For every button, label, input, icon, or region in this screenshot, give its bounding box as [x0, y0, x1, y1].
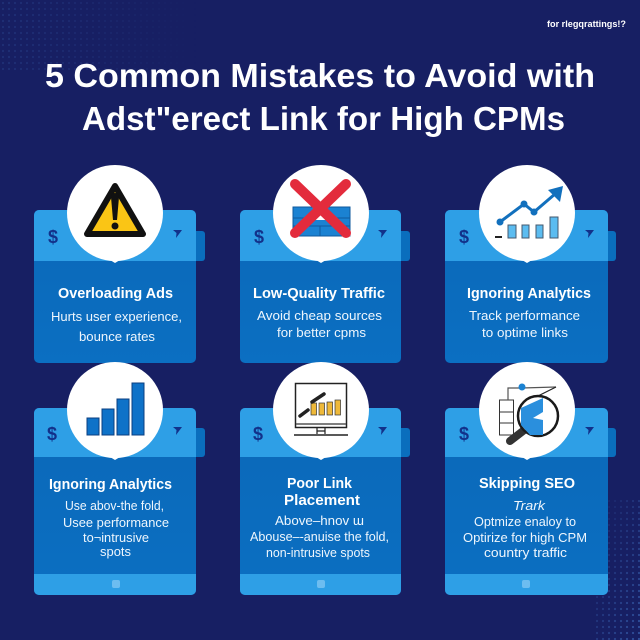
- panel: ignoring analytics top: $: [459, 227, 469, 247]
- text: overloading ads description: [51, 309, 182, 344]
- text: skipping seo description: Optirize for high CPM: [463, 530, 587, 545]
- text: ignoring analytics top description: [469, 308, 580, 340]
- text: skipping seo description: [463, 498, 587, 560]
- heading: ignoring analytics top: Ignoring Analytics: [467, 286, 591, 302]
- text: ignoring analytics top description: Track performance: [469, 308, 580, 323]
- text: ignoring analytics top description: to optime links: [482, 325, 569, 340]
- panel: skipping seo: [445, 362, 616, 595]
- heading: ignoring analytics bottom: Ignoring Analytics: [49, 477, 172, 493]
- panel: ignoring analytics bottom: $: [47, 424, 57, 444]
- title: [45, 57, 595, 137]
- title: Adst"erect Link for High CPMs: [82, 100, 565, 137]
- text: poor link placement description: non-intrusive spots: [266, 545, 370, 560]
- heading: poor link placement: Poor Link: [287, 476, 353, 492]
- heading: overloading ads: Overloading Ads: [58, 286, 173, 302]
- text: poor link placement description: [250, 513, 389, 560]
- panel: overloading ads: $: [48, 227, 58, 247]
- panel: poor link placement: [240, 362, 410, 595]
- heading: low-quality traffic: Low-Quality Traffic: [253, 286, 385, 302]
- text: low-quality traffic description: for better cpms: [277, 325, 367, 340]
- heading: poor link placement: Placement: [284, 493, 360, 509]
- text: poor link placement description: Abouse–-anuise the fold,: [250, 529, 389, 544]
- panel: ignoring analytics bottom: [34, 362, 205, 595]
- text: skipping seo description: country traffic: [484, 545, 568, 560]
- icon: warning triangle: [87, 186, 143, 234]
- text: poor link placement description: Above–hnov ɯ: [275, 513, 364, 528]
- icon: rising bars: [87, 383, 144, 435]
- top-right tagline: for rlegqrattings!?: [547, 19, 626, 29]
- heading: poor link placement: [284, 476, 360, 509]
- text: ignoring analytics bottom description: spots: [100, 544, 131, 559]
- text: skipping seo description: Optmize enaloy to: [474, 514, 576, 529]
- panel: skipping seo: $: [459, 424, 469, 444]
- title: 5 Common Mistakes to Avoid with: [45, 57, 595, 94]
- text: ignoring analytics bottom description: [63, 498, 169, 559]
- text: low-quality traffic description: [257, 308, 383, 340]
- panel: poor link placement: $: [253, 424, 263, 444]
- icon: trend line and bars: [495, 186, 563, 238]
- text: ignoring analytics bottom description: Usee performance: [63, 515, 169, 530]
- panel: overloading ads: [34, 165, 205, 363]
- text: ignoring analytics bottom description: Use abov-the fold,: [65, 498, 164, 513]
- panel: low-quality traffic: [240, 165, 410, 363]
- text: overloading ads description: bounce rates: [79, 329, 155, 344]
- heading: skipping seo: Skipping SEO: [479, 476, 575, 492]
- text: skipping seo description: Trark: [513, 498, 547, 513]
- icon: monitor with chart: [294, 384, 348, 435]
- icon: crossed-out bricks: [293, 184, 350, 236]
- text: overloading ads description: Hurts user experience,: [51, 309, 182, 324]
- panel: low-quality traffic: $: [254, 227, 264, 247]
- icon: magnifying glass over chart: [500, 384, 558, 441]
- text: ignoring analytics bottom description: to¬intrusive: [83, 530, 149, 545]
- panel: ignoring analytics top: [445, 165, 616, 363]
- text: low-quality traffic description: Avoid cheap sources: [257, 308, 383, 323]
